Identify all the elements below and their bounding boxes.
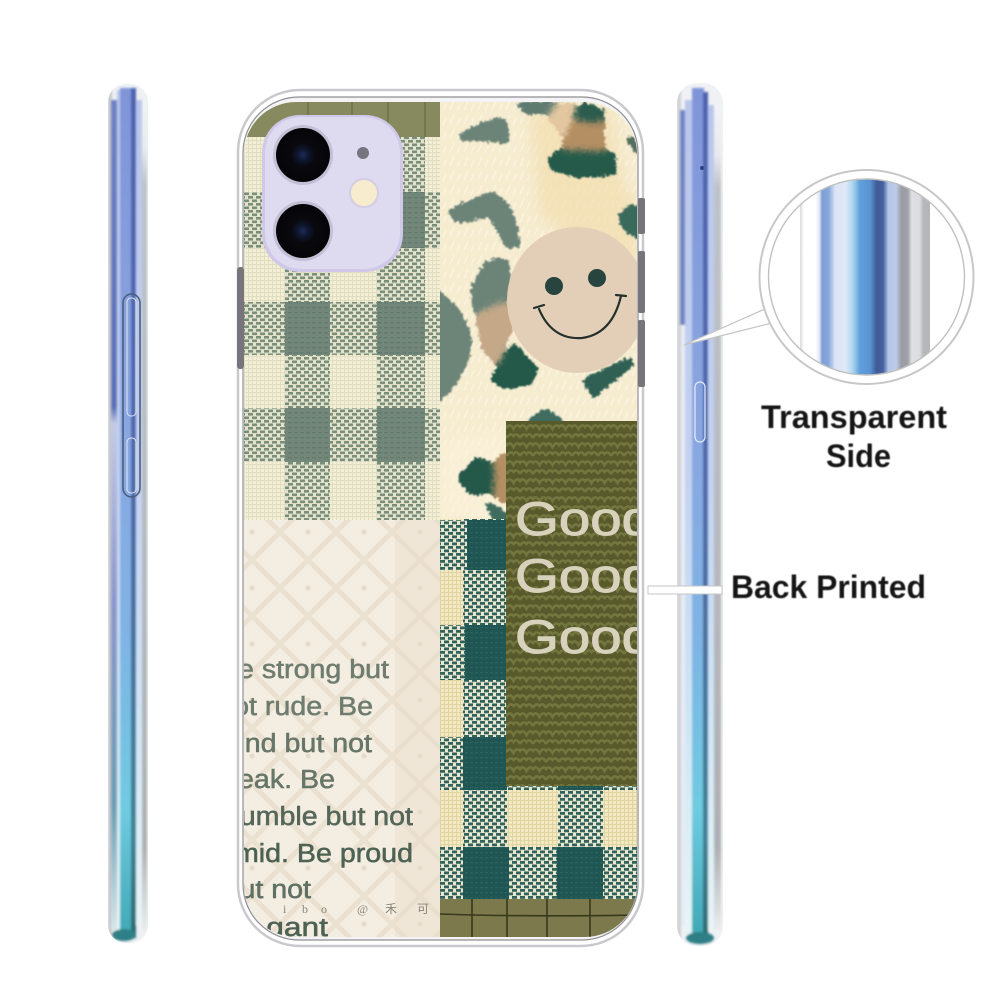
label: Transparent Side: Side xyxy=(826,438,891,474)
label: Transparent Side: Transparent xyxy=(761,399,947,435)
left side view of case xyxy=(108,84,148,943)
lens: top xyxy=(273,125,333,185)
lens: bottom xyxy=(273,201,333,261)
knit text: Good repeated xyxy=(517,502,637,654)
right side view of case xyxy=(677,83,723,946)
callout pointer xyxy=(684,308,772,345)
magnified stripes xyxy=(800,180,930,374)
quote text on cable knit: but not xyxy=(224,874,311,904)
patch: cream cable knit xyxy=(244,520,440,938)
quote text on cable knit xyxy=(244,658,414,936)
knit text: Good repeated: Good xyxy=(515,492,653,545)
right side button outline xyxy=(695,382,705,442)
clear case frame xyxy=(238,90,643,946)
printed artwork xyxy=(244,102,637,937)
quote text on cable knit: timid. Be proud xyxy=(221,838,413,868)
connector: back printed xyxy=(648,586,722,594)
quote text on cable knit: humble but not xyxy=(224,801,413,831)
microphone dot xyxy=(357,147,369,159)
phone case back xyxy=(216,90,653,946)
flash xyxy=(350,179,378,207)
quote text on cable knit: not rude. Be xyxy=(217,691,373,721)
quote text on cable knit: weak. Be xyxy=(216,764,335,794)
callout: transparent side magnifier xyxy=(684,170,974,384)
quote text on cable knit: kind but not xyxy=(224,728,372,758)
patch: dark green gingham xyxy=(440,519,637,899)
warm wash on fur xyxy=(527,105,637,262)
knit text: Good repeated: Good xyxy=(515,610,653,663)
leopard spots xyxy=(430,102,642,525)
patch: sage gingham xyxy=(244,137,440,520)
patch: olive grid bottom right xyxy=(440,899,637,939)
quote text on cable knit: gant xyxy=(266,914,328,942)
side buttons on the case xyxy=(237,198,645,387)
patch: leopard fur xyxy=(430,102,642,525)
patch: olive knit xyxy=(506,421,637,786)
smiley face xyxy=(507,227,647,373)
patch: olive stripe top left xyxy=(244,102,440,138)
quote text on cable knit: Be strong but xyxy=(219,654,389,684)
label: Transparent Side xyxy=(761,399,947,474)
left side buttons xyxy=(123,294,140,497)
watermark text: ibo@禾可 xyxy=(283,902,429,916)
camera module xyxy=(262,115,403,272)
label: Back Printed: Back Printed xyxy=(731,569,926,605)
knit text: Good repeated: Good xyxy=(515,549,653,602)
